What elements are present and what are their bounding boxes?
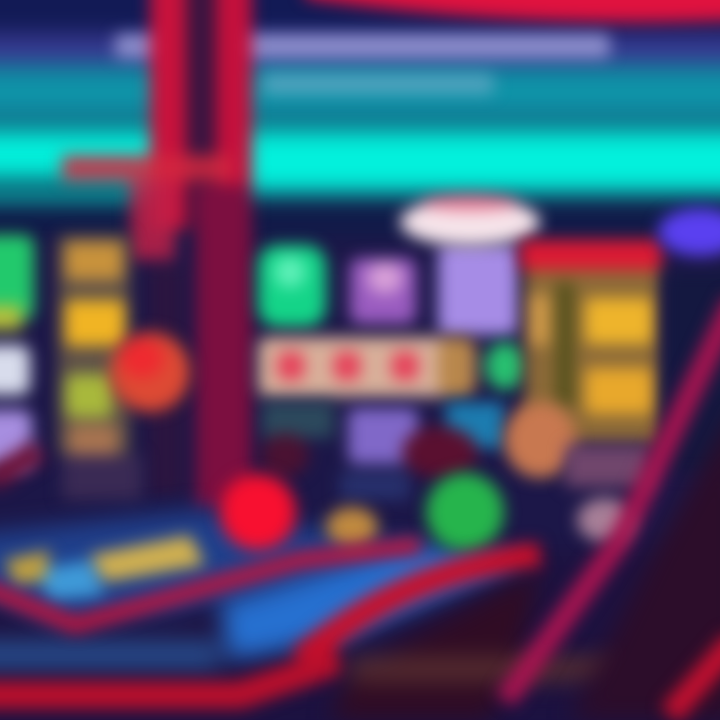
red console edges xyxy=(0,450,540,695)
icon: red button xyxy=(220,474,296,550)
centre reels panel xyxy=(258,337,525,397)
left edge machine xyxy=(0,235,34,470)
icon: red orange button xyxy=(110,332,190,412)
red ceiling band xyxy=(305,0,720,22)
white glowing dome xyxy=(400,195,540,246)
red pillars xyxy=(62,0,252,510)
heading: blurred title lines xyxy=(115,34,610,94)
left slot machine xyxy=(58,235,142,500)
right edge glow xyxy=(658,208,720,472)
table surface xyxy=(0,510,530,670)
centre green and purple screens xyxy=(258,245,518,335)
icon: green button xyxy=(426,473,504,551)
right foreground red frame xyxy=(505,300,720,715)
left darker cyan corner xyxy=(0,178,140,202)
icon: copper round button xyxy=(504,402,576,478)
icon: orange button xyxy=(326,507,378,547)
lower right dark console xyxy=(330,570,640,720)
right slot machine xyxy=(520,240,662,443)
lower centre console xyxy=(261,402,504,500)
right machine base xyxy=(565,445,650,542)
right foreground dark panel xyxy=(570,400,720,720)
yellow tray on table xyxy=(5,535,205,600)
